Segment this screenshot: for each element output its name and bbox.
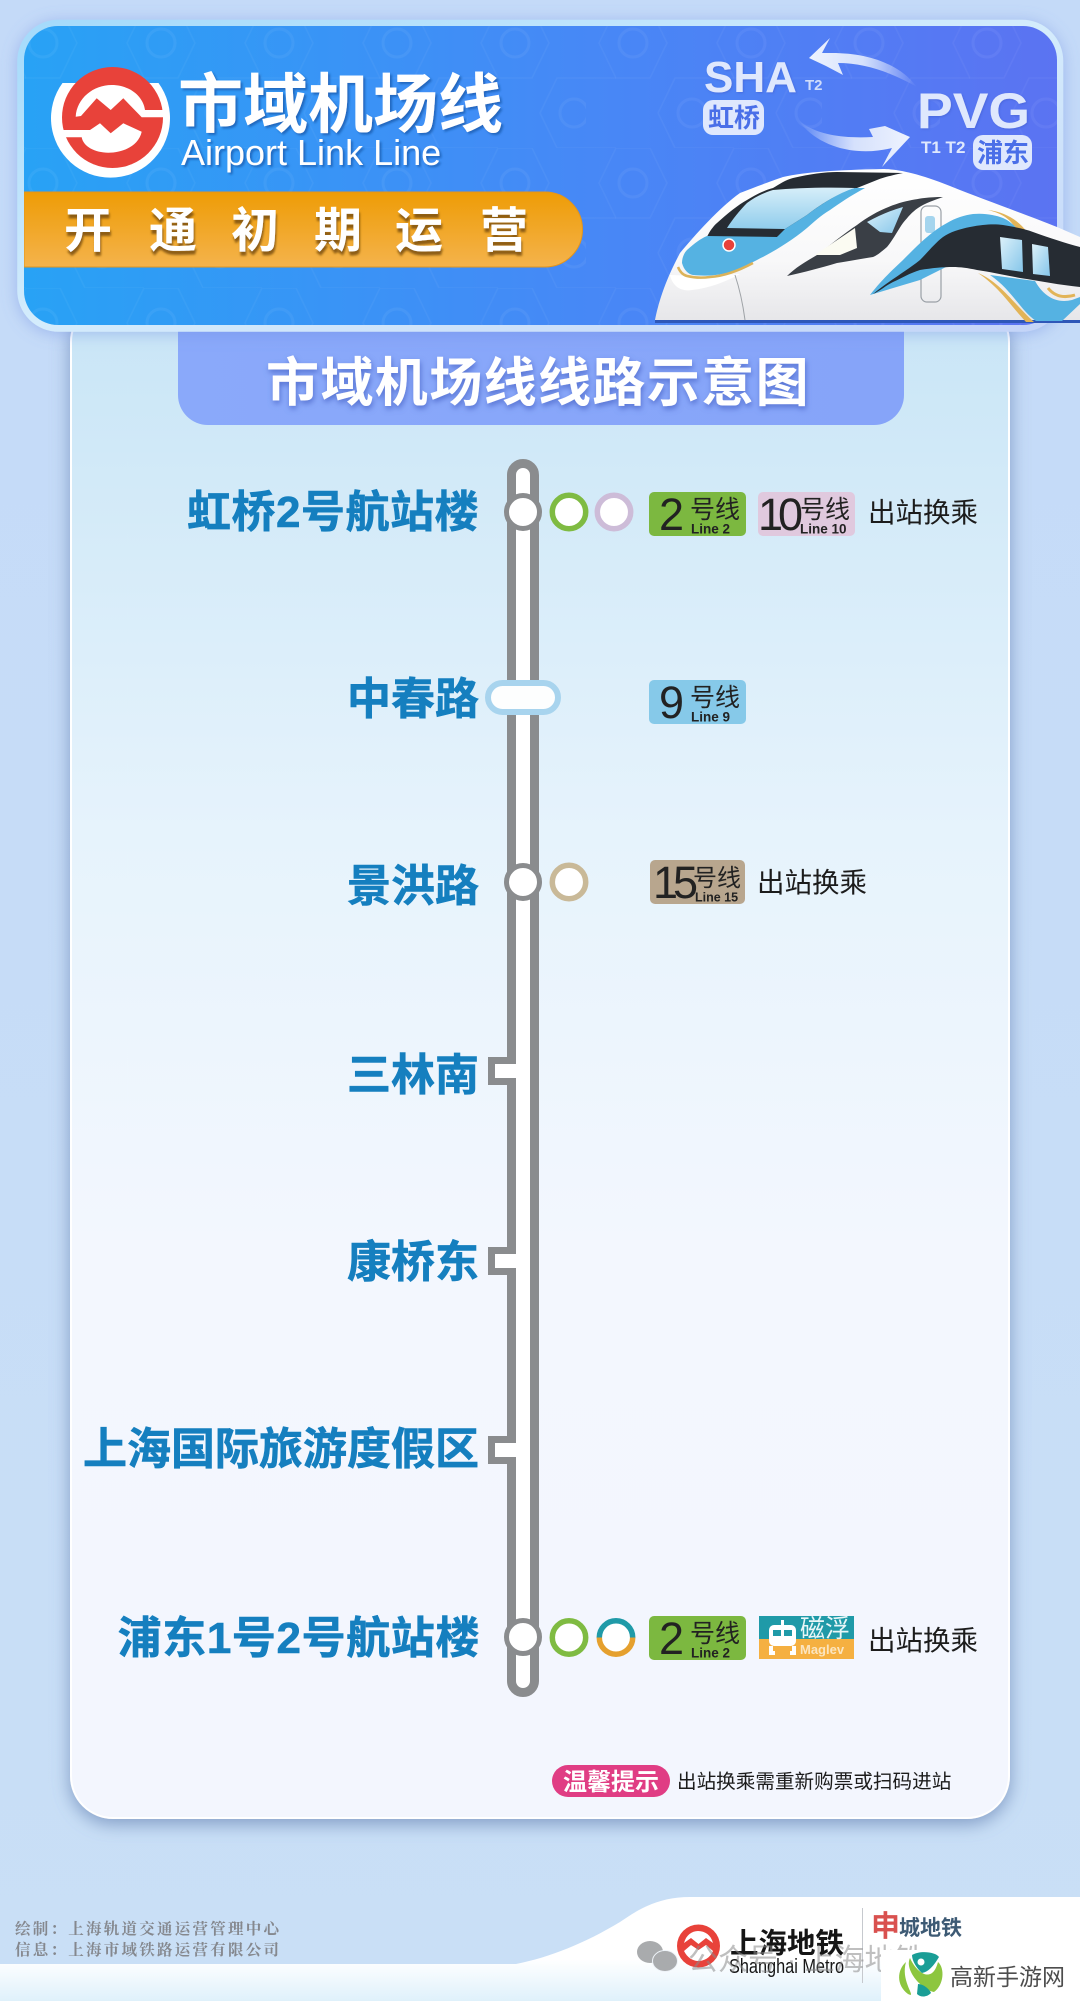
label: SHA Hongqiao: SHA — [704, 53, 797, 102]
line badge: maglev: 磁浮 — [800, 1615, 850, 1643]
line badge: line 9: 9 — [659, 677, 684, 728]
station marker: 景洪路 — [506, 866, 540, 898]
station label: 上海国际旅游度假区: 上海国际旅游度假区 — [83, 1425, 479, 1474]
label: PVG Pudong: T1 T2 — [921, 138, 965, 157]
callout: transfer tip: 出站换乘需重新购票或扫码进站 — [677, 1771, 951, 1793]
line badge: line 2 at Pudong — [649, 1613, 746, 1664]
interchange ring: maglev at Pudong — [599, 1621, 633, 1654]
banner: opening operation: 期 — [314, 205, 362, 258]
train white highlight — [670, 274, 740, 290]
banner: opening operation: 开 — [64, 205, 112, 258]
train nose stripe — [682, 188, 865, 276]
chart: metro line track — [488, 464, 558, 1692]
train lower blue stripe — [990, 275, 1080, 321]
line badge: line 9: Line 9 — [691, 710, 730, 724]
line badge: line 9: 号线 — [690, 684, 740, 712]
logo: Shanghai Metro: 上海地铁 — [730, 1928, 844, 1960]
line badge: line 2 at Hongqiao: 号线 — [690, 496, 740, 524]
label: SHA Hongqiao: 虹桥 — [708, 103, 760, 133]
icon: site logo — [899, 1952, 943, 1996]
train door — [921, 206, 941, 302]
label: PVG Pudong: PVG — [917, 83, 1030, 139]
line badge: line 15: 15 — [653, 857, 697, 908]
watermark: site badge: 高新手游网 — [950, 1964, 1065, 1990]
banner: opening operation: 通 — [149, 205, 197, 258]
station marker: 虹桥2号航站楼 — [506, 496, 540, 528]
banner: opening operation: 运 — [395, 205, 443, 258]
watermark: site badge — [881, 1950, 1080, 2001]
logo: Shanghai Metro — [677, 1924, 844, 1978]
interchange ring: line 15 at Jinghong Road — [552, 865, 586, 899]
station label: 三林南: 三林南 — [347, 1051, 479, 1100]
interchange ring: line 2 at Pudong — [552, 1621, 586, 1654]
arrow: Hongqiao to Pudong — [798, 120, 910, 167]
line badge: line 9 — [649, 677, 746, 728]
banner: opening operation: 营 — [480, 205, 528, 258]
station label: 虹桥2号航站楼: 虹桥2号航站楼 — [187, 488, 479, 537]
icon: Shanghai Metro logo — [51, 67, 170, 178]
train rear dark band — [873, 224, 1080, 294]
station tick: 上海国际旅游度假区 — [488, 1436, 530, 1464]
train side window shape — [787, 197, 943, 276]
train lower gold accent — [978, 273, 1034, 322]
train windscreen glass — [727, 188, 855, 229]
panel: section heading — [178, 325, 904, 425]
station tick: 三林南 — [488, 1057, 530, 1085]
heading: Airport Link Line English title: Airport Link Line — [181, 132, 441, 173]
logo: Shencheng Metro: 城地铁 — [899, 1917, 962, 1940]
train badge — [723, 239, 735, 251]
station label: 浦东1号2号航站楼: 浦东1号2号航站楼 — [118, 1614, 480, 1663]
line badge: maglev — [759, 1615, 854, 1659]
line badge: line 15: Line 15 — [695, 890, 738, 904]
line badge: line 2 at Pudong: 号线 — [690, 1620, 740, 1648]
text block: credits — [15, 1919, 281, 1959]
line badge: maglev: Maglev — [800, 1642, 845, 1657]
interchange ring: line 2 at Hongqiao — [552, 495, 586, 529]
icon: maglev train — [769, 1620, 796, 1653]
line badge: line 2 at Pudong: 2 — [659, 1613, 684, 1664]
banner: opening operation: 初 — [231, 205, 279, 258]
text block: credits: 绘制：上海轨道交通运营管理中心 — [15, 1919, 281, 1938]
label: PVG Pudong: 浦东 — [977, 138, 1029, 168]
heading: Airport Link Line Chinese title: 市域机场线 — [178, 68, 503, 141]
line badge: line 2 at Hongqiao — [649, 489, 746, 540]
line badge: line 10: 10 — [758, 489, 802, 540]
icon: airport train — [655, 169, 1080, 323]
label: PVG Pudong — [917, 83, 1032, 170]
train windscreen frame — [707, 172, 903, 237]
station label: 康桥东: 康桥东 — [347, 1238, 479, 1287]
arrow: Pudong to Hongqiao — [809, 38, 917, 87]
watermark: WeChat account: 公众号 · 上海地铁 — [688, 1944, 925, 1977]
station label: 景洪路: 景洪路 — [347, 862, 479, 911]
train cabin windows — [1000, 237, 1050, 276]
banner: opening operation — [24, 192, 582, 267]
line badge: line 15: 号线 — [693, 865, 741, 892]
callout: transfer tip — [552, 1765, 951, 1797]
line badge: line 10: 号线 — [800, 496, 850, 524]
logo: Shanghai Metro: Shanghai Metro — [729, 1956, 844, 1978]
station label: 中春路: 中春路 — [347, 675, 479, 724]
text block: credits: 信息：上海市域铁路运营有限公司 — [15, 1940, 279, 1959]
panel: route map card — [71, 300, 1009, 1818]
logo: Shencheng Metro — [862, 1908, 962, 1983]
transfer note: Pudong: 出站换乘 — [868, 1625, 978, 1656]
train gold line — [678, 263, 753, 278]
logo: Shencheng Metro: 申 — [871, 1910, 900, 1943]
label: SHA Hongqiao: T2 — [805, 77, 823, 94]
line badge: line 2 at Hongqiao: 2 — [659, 489, 684, 540]
line badge: line 10: Line 10 — [800, 522, 847, 536]
train rear blue stripe — [870, 214, 1020, 295]
transfer note: Jinghong Road: 出站换乘 — [757, 867, 867, 898]
station tick: 康桥东 — [488, 1247, 530, 1275]
line badge: line 15 — [650, 857, 745, 908]
transfer note: Hongqiao: 出站换乘 — [868, 497, 978, 528]
line badge: line 2 at Pudong: Line 2 — [691, 1646, 730, 1660]
panel: header banner — [20, 23, 1080, 328]
line badge: line 10 — [758, 489, 855, 540]
line badge: line 2 at Hongqiao: Line 2 — [691, 522, 730, 536]
label: SHA Hongqiao — [703, 53, 823, 135]
heading: route diagram title: 市域机场线线路示意图 — [266, 354, 810, 413]
train seam — [735, 275, 745, 320]
station marker: 中春路 — [488, 683, 558, 712]
callout: transfer tip: 温馨提示 — [563, 1769, 659, 1796]
station marker: 浦东1号2号航站楼 — [506, 1620, 540, 1654]
interchange ring: line 10 at Hongqiao — [597, 495, 631, 529]
train rear gold accent — [988, 210, 1027, 232]
footer wave — [0, 1897, 1080, 2001]
